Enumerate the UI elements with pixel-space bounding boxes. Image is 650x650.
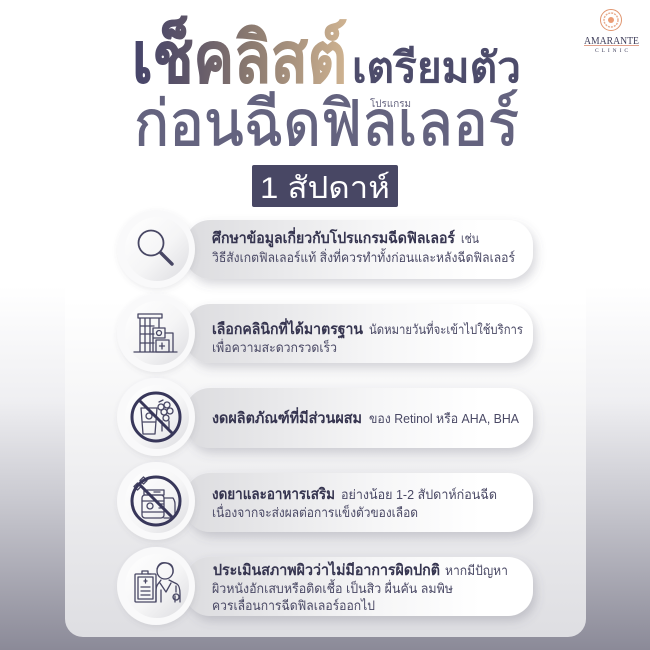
logo: Amarante Clinic <box>584 10 639 54</box>
panel: step 5 skin assessment <box>117 547 533 625</box>
panel: checklist background <box>65 200 586 637</box>
step 5 icon: doctor with clipboard <box>117 547 195 625</box>
logo: Amarante Clinic: CLINIC <box>595 48 628 54</box>
step 5 text: หากมีปัญหา <box>445 563 508 578</box>
step 1 text: เช่น <box>461 231 479 246</box>
step 2 icon: hospital <box>117 294 195 372</box>
panel: step 3 skincare <box>117 378 533 456</box>
step 1 text: ศึกษาข้อมูลเกี่ยวกับโปรแกรมฉีดฟิลเลอร์ <box>212 227 456 248</box>
step 5 text: ควรเลื่อนการฉีดฟิลเลอร์ออกไป <box>212 597 375 613</box>
step 4 text: อย่างน้อย 1-2 สัปดาห์ก่อนฉีด <box>341 487 497 502</box>
step 5 text: ผิวหนังอักเสบหรือติดเชื้อ เป็นสิว ผื่นคัน ลมพิษ <box>212 579 453 596</box>
step 4 text <box>212 485 497 520</box>
step 2 text: เลือกคลินิกที่ได้มาตรฐาน <box>212 318 364 339</box>
step 2 text: นัดหมายวันที่จะเข้าไปใช้บริการ <box>369 321 523 337</box>
panel: step 4 medication <box>117 462 533 540</box>
badge: 1 week: 1 สัปดาห์ <box>260 171 390 205</box>
title: checklist heading: เช็คลิสต์ <box>132 15 347 97</box>
title: checklist heading: โปรแกรม <box>370 97 411 110</box>
title: checklist heading <box>132 15 521 159</box>
step 2 text <box>212 318 523 355</box>
panel: step 1 research <box>117 210 533 288</box>
step 5 text <box>212 560 508 613</box>
logo: Amarante Clinic: AMARANTE <box>584 35 639 47</box>
step 4 icon: no supplements <box>117 462 195 540</box>
panel: step 2 clinic <box>117 294 533 372</box>
step 2 text: เพื่อความสะดวกรวดเร็ว <box>212 338 337 355</box>
step 1 icon: magnifier <box>117 210 195 288</box>
step 4 text: เนื่องจากจะส่งผลต่อการแข็งตัวของเลือด <box>212 503 418 520</box>
step 5 text: ประเมินสภาพผิวว่าไม่มีอาการผิดปกติ <box>213 560 440 579</box>
title: checklist heading: เตรียมตัว <box>352 44 521 91</box>
badge: 1 week <box>252 165 398 207</box>
title: checklist heading: ก่อนฉีดฟิลเลอร์ <box>134 89 519 159</box>
step 3 icon: no products <box>117 378 195 456</box>
step 1 text: วิธีสังเกตฟิลเลอร์แท้ สิ่งที่ควรทำทั้งก่อนและหลังฉีดฟิลเลอร์ <box>211 248 515 265</box>
step 3 text <box>212 407 519 427</box>
step 1 text <box>211 227 515 265</box>
step 3 text: ของ Retinol หรือ AHA, BHA <box>369 411 519 426</box>
step 4 text: งดยาและอาหารเสริม <box>212 485 335 503</box>
step 3 text: งดผลิตภัณฑ์ที่มีส่วนผสม <box>212 407 362 427</box>
